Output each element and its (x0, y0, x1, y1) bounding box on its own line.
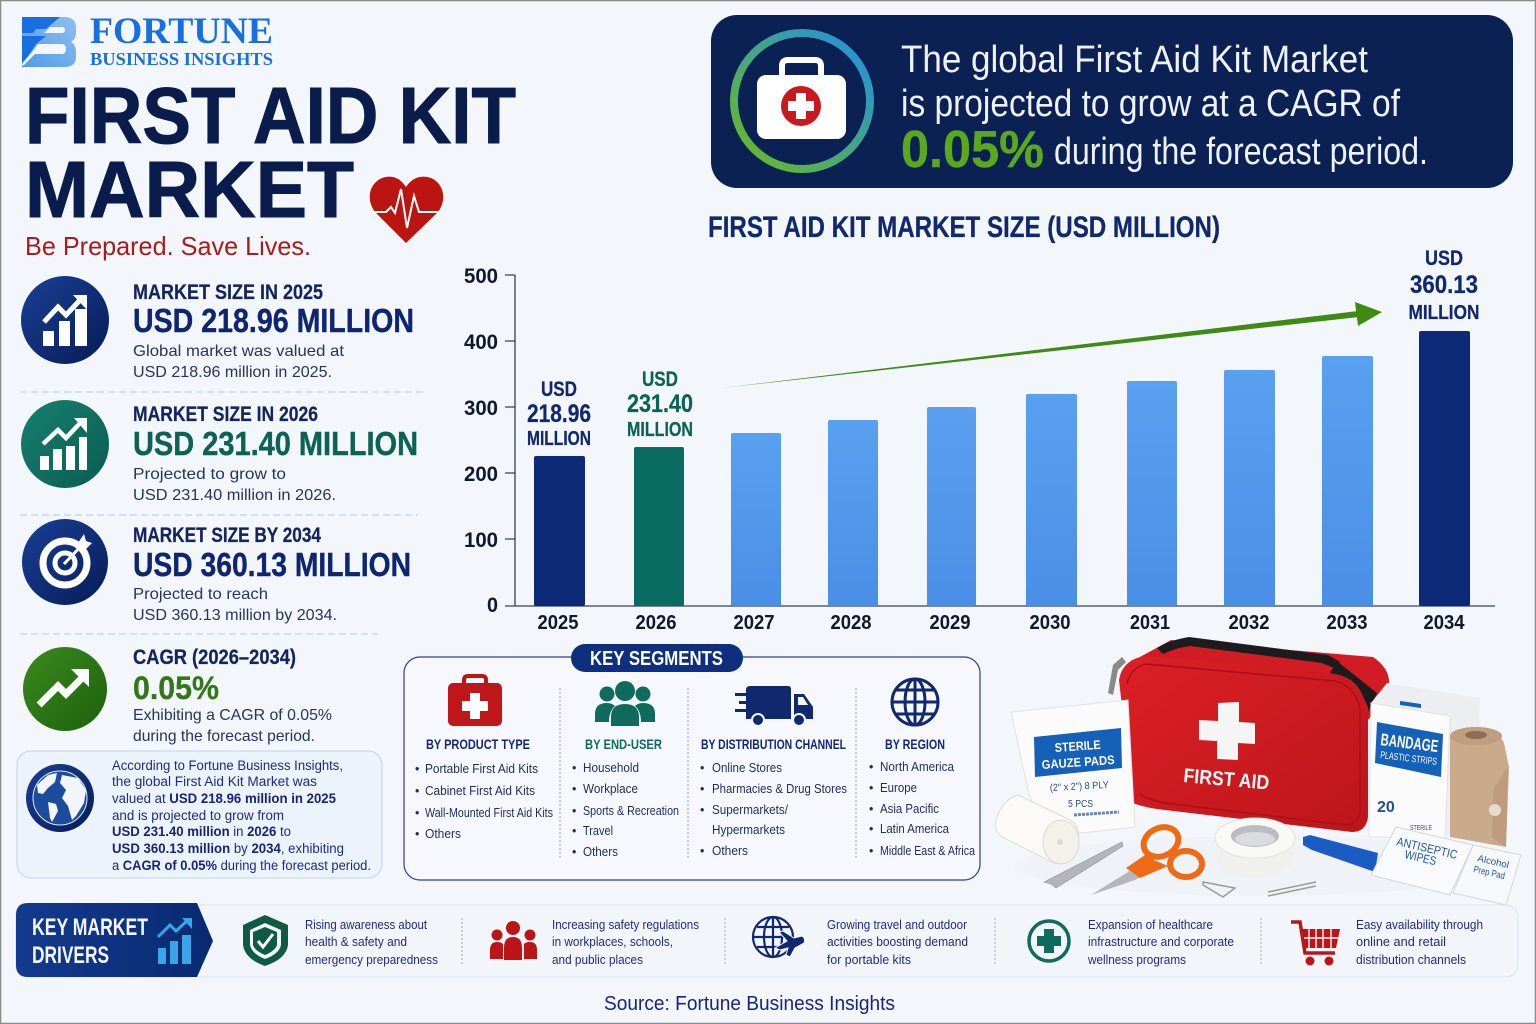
value label 2026: USD (642, 368, 678, 391)
column: by distribution channel: • (700, 844, 704, 858)
stat: market size 2034: MARKET SIZE BY 2034 (133, 524, 321, 547)
y axis: 0 (487, 594, 498, 617)
column: by region (869, 679, 975, 858)
value label 2034: USD (1425, 247, 1463, 270)
stat: market size 2025: MARKET SIZE IN 2025 (133, 281, 323, 304)
column: by distribution channel: Others (712, 844, 748, 858)
stat: CAGR: during the forecast period. (133, 728, 315, 745)
y axis: 400 (464, 331, 498, 354)
driver: travel: Growing travel and outdoor (827, 918, 967, 932)
logo: Fortune Business Insights: FORTUNE (90, 11, 273, 52)
value label 2026 (627, 368, 693, 441)
x axis labels: 2030 (1030, 612, 1070, 634)
sterile gauze pads: (2" x 2") 8 PLY (1050, 780, 1109, 794)
column: by product type: • (415, 827, 419, 841)
value label 2034 (1408, 247, 1480, 324)
bars (534, 331, 1470, 606)
source note: Source: Fortune Business Insights (604, 993, 895, 1015)
driver: availability (1291, 918, 1483, 967)
stat: market size 2034: USD 360.13 million by 2034. (133, 607, 337, 624)
stat: market size 2026: USD 231.40 million in 2026. (133, 487, 336, 504)
driver: regulations: in workplaces, schools, (552, 935, 673, 949)
sterile gauze pads: 5 PCS (1068, 799, 1093, 810)
icon: growth chart navy (21, 276, 109, 364)
column: by region: Asia Pacific (880, 802, 939, 816)
icon: globe (26, 764, 94, 832)
antiseptic wipes: ANTISEPTIC (1395, 834, 1459, 862)
safety pins (1203, 882, 1316, 897)
icon: trend arrow (23, 647, 107, 731)
x axis labels: 2033 (1326, 612, 1368, 634)
stat: market size 2026: MARKET SIZE IN 2026 (133, 403, 318, 426)
stat: market size 2025: Global market was valued at (133, 343, 345, 360)
heading: key segments pill (571, 644, 743, 672)
value label 2034: 360.13 (1410, 271, 1478, 299)
alcohol prep pad (1453, 845, 1521, 905)
value label 2025: USD (541, 378, 577, 401)
red first aid bag: FIRST AID (1183, 765, 1270, 794)
icon: shield check (243, 915, 288, 966)
gauze roll (995, 795, 1079, 864)
column: by end-user: • (572, 804, 576, 818)
logo: Fortune Business Insights: BUSINESS INSIGHTS (90, 49, 273, 69)
icon: group of people teal (595, 681, 655, 726)
stat: market size 2034: USD 360.13 MILLION (133, 546, 411, 583)
tweezers (1044, 842, 1123, 888)
icon: growth chart teal (21, 400, 109, 488)
y axis: 300 (464, 397, 498, 420)
panel: summary callout: USD 360.13 million by 2034, exhibiting (112, 841, 344, 856)
panel: CAGR banner (711, 15, 1513, 188)
title (25, 71, 516, 234)
y axis (464, 265, 1495, 617)
x axis labels: 2031 (1130, 612, 1170, 634)
elastic bandage roll (1450, 727, 1509, 847)
column: by end-user: BY END-USER (585, 736, 662, 752)
column: by product type: • (415, 806, 419, 820)
driver: travel: for portable kits (827, 953, 911, 967)
column: by region: Europe (880, 781, 917, 795)
illustration: first aid kit and supplies (995, 637, 1521, 905)
bandage box: BANDAGE (1380, 730, 1439, 756)
column: by region: North America (880, 760, 954, 774)
title: FIRST AID KIT (25, 71, 516, 160)
panel: CAGR banner: during the forecast period. (1054, 131, 1428, 173)
panel: summary callout: a CAGR of 0.05% during the forecast period. (112, 858, 371, 873)
panel: summary callout: valued at USD 218.96 million in 2025 (112, 791, 336, 806)
bar chart (464, 247, 1495, 634)
column: by product type: • (415, 784, 419, 798)
column: by region: Latin America (880, 822, 949, 836)
heading: key segments pill: KEY SEGMENTS (590, 648, 723, 670)
stat: market size 2026 (21, 400, 418, 504)
icon: target (22, 519, 108, 605)
driver: regulations: and public places (552, 953, 643, 967)
bandage box (1369, 683, 1480, 838)
icon: shopping cart (1291, 922, 1340, 966)
column: by distribution channel: • (700, 782, 704, 796)
icon: wireframe globe (892, 679, 938, 725)
column: by end-user: • (572, 782, 576, 796)
heading: key market drivers label (16, 903, 213, 977)
driver: healthcare: wellness programs (1087, 953, 1186, 967)
x axis labels (538, 612, 1465, 634)
x axis labels: 2034 (1424, 612, 1465, 634)
value label 2026: 231.40 (627, 390, 693, 418)
y axis: 100 (464, 529, 498, 552)
chart title: FIRST AID KIT MARKET SIZE (USD MILLION) (708, 211, 1220, 244)
title: MARKET (25, 145, 354, 234)
column: by distribution channel: BY DISTRIBUTION CHANNEL (701, 736, 846, 752)
stat: CAGR: Exhibiting a CAGR of 0.05% (133, 707, 332, 724)
driver: availability: online and retail (1356, 935, 1446, 949)
driver: healthcare: Expansion of healthcare (1088, 918, 1213, 932)
bandage box: PLASTIC STRIPS (1380, 750, 1438, 768)
antiseptic wipes (1371, 827, 1473, 895)
column: by distribution channel: Supermarkets/ (712, 803, 788, 817)
stat: market size 2026: Projected to grow to (133, 466, 286, 483)
panel: summary callout: USD 231.40 million in 2026 to (112, 824, 291, 839)
value label 2025 (527, 378, 591, 450)
column: by product type (415, 676, 553, 841)
icon: first aid case in ring (734, 33, 870, 169)
alcohol prep pad: Alcohol (1476, 853, 1510, 871)
driver: awareness: health & safety and (305, 935, 407, 949)
column: by end-user: • (572, 824, 576, 838)
x axis labels: 2025 (538, 612, 578, 634)
driver: healthcare (1029, 918, 1234, 967)
column: by product type: • (415, 762, 419, 776)
tagline: Be Prepared. Save Lives. (25, 231, 311, 261)
y axis: 200 (464, 463, 498, 486)
value label 2025: 218.96 (527, 400, 591, 428)
value label 2025: MILLION (527, 428, 591, 450)
driver: travel: activities boosting demand (827, 935, 968, 949)
panel: CAGR banner: is projected to grow at a CAGR of (901, 83, 1400, 125)
panel: CAGR banner: 0.05% (901, 121, 1044, 179)
driver: awareness (243, 915, 438, 967)
column: by region: • (869, 822, 873, 836)
icon: red first aid kit (448, 676, 502, 726)
panel: key market drivers (16, 903, 1518, 977)
column: by product type: Portable First Aid Kits (425, 762, 538, 776)
value label 2026: MILLION (627, 419, 693, 441)
driver: regulations (490, 918, 699, 967)
icon: green cross (1029, 921, 1069, 961)
column: by product type: Wall-Mounted First Aid Kits (425, 806, 553, 820)
alcohol prep pad: Prep Pad (1472, 864, 1506, 882)
driver: travel (753, 917, 968, 967)
driver: healthcare: infrastructure and corporate (1088, 935, 1234, 949)
icon: heart with ECG (370, 177, 443, 243)
column: by end-user: Travel (583, 824, 613, 838)
panel: summary callout (17, 751, 382, 878)
floor shadow (1015, 836, 1505, 896)
column: by region: Middle East & Africa (880, 844, 975, 858)
column: by product type: BY PRODUCT TYPE (426, 736, 530, 752)
column: by distribution channel: Hypermarkets (712, 823, 785, 837)
sterile gauze pads: STERILE (1054, 738, 1101, 755)
stat: market size 2034 (22, 519, 411, 624)
heading: key market drivers label: KEY MARKET (32, 914, 148, 941)
driver: awareness: Rising awareness about (305, 918, 427, 932)
x axis labels: 2029 (930, 612, 970, 634)
scissors (1091, 822, 1202, 895)
panel: key segments (404, 644, 980, 880)
stat: CAGR (23, 646, 332, 745)
stat: CAGR: 0.05% (133, 670, 219, 706)
column: by region: • (869, 802, 873, 816)
driver: availability: Easy availability through (1356, 918, 1483, 932)
column: by region: • (869, 760, 873, 774)
column: by distribution channel (700, 686, 847, 858)
arrow: growth trend (722, 302, 1382, 388)
logo: Fortune Business Insights (22, 11, 273, 69)
heading: key market drivers label: DRIVERS (32, 942, 109, 969)
driver: regulations: Increasing safety regulations (552, 918, 699, 932)
column: by distribution channel: Online Stores (712, 761, 782, 775)
stat: market size 2025: USD 218.96 MILLION (133, 302, 414, 339)
sterile gauze pads (1011, 700, 1135, 836)
icon: delivery truck (735, 686, 813, 726)
antiseptic wipes: WIPES (1403, 847, 1438, 868)
column: by end-user: Sports & Recreation (583, 804, 679, 818)
column: by end-user: Workplace (583, 782, 638, 796)
column: by region: BY REGION (885, 736, 945, 752)
y axis: 500 (464, 265, 498, 288)
column: by end-user: Others (583, 845, 618, 859)
column: by distribution channel: • (700, 803, 704, 817)
column: by distribution channel: Pharmacies & Drug Stores (712, 782, 847, 796)
driver: awareness: emergency preparedness (305, 953, 438, 967)
column: by end-user (572, 681, 679, 859)
column: by product type: Cabinet First Aid Kits (425, 784, 535, 798)
column: by end-user: • (572, 761, 576, 775)
column: by region: • (869, 844, 873, 858)
x axis labels: 2027 (734, 612, 774, 634)
stat: market size 2026: USD 231.40 MILLION (133, 425, 418, 462)
driver: availability: distribution channels (1356, 953, 1466, 967)
icon: globe and plane (753, 917, 805, 957)
panel: summary callout: the global First Aid Kit Market was (112, 774, 317, 789)
icon: red people (490, 921, 537, 960)
x axis labels: 2032 (1228, 612, 1270, 634)
column: by end-user: • (572, 845, 576, 859)
column: by product type: Others (425, 827, 461, 841)
panel: summary callout: and is projected to grow from (112, 808, 284, 823)
red first aid bag (1108, 637, 1389, 832)
panel: summary callout: According to Fortune Business Insights, (112, 758, 343, 773)
panel: CAGR banner: The global First Aid Kit Market (901, 39, 1368, 81)
stat: market size 2025: USD 218.96 million in 2025. (133, 364, 332, 381)
stat: market size 2025 (21, 276, 414, 381)
stat: CAGR: CAGR (2026–2034) (133, 646, 296, 669)
x axis labels: 2026 (636, 612, 676, 634)
column: by distribution channel: • (700, 761, 704, 775)
sterile gauze pads: GAUZE PADS (1041, 753, 1115, 772)
column: by region: • (869, 781, 873, 795)
bandage box: STERILE (1410, 823, 1432, 832)
x axis labels: 2028 (830, 612, 872, 634)
bandage box: 20 (1377, 799, 1395, 816)
medical tape (1215, 818, 1295, 878)
stat: market size 2034: Projected to reach (133, 586, 268, 603)
value label 2034: MILLION (1408, 302, 1480, 324)
blue tweezers (1303, 835, 1378, 872)
column: by end-user: Household (583, 761, 639, 775)
icon: rising chart (158, 918, 192, 964)
